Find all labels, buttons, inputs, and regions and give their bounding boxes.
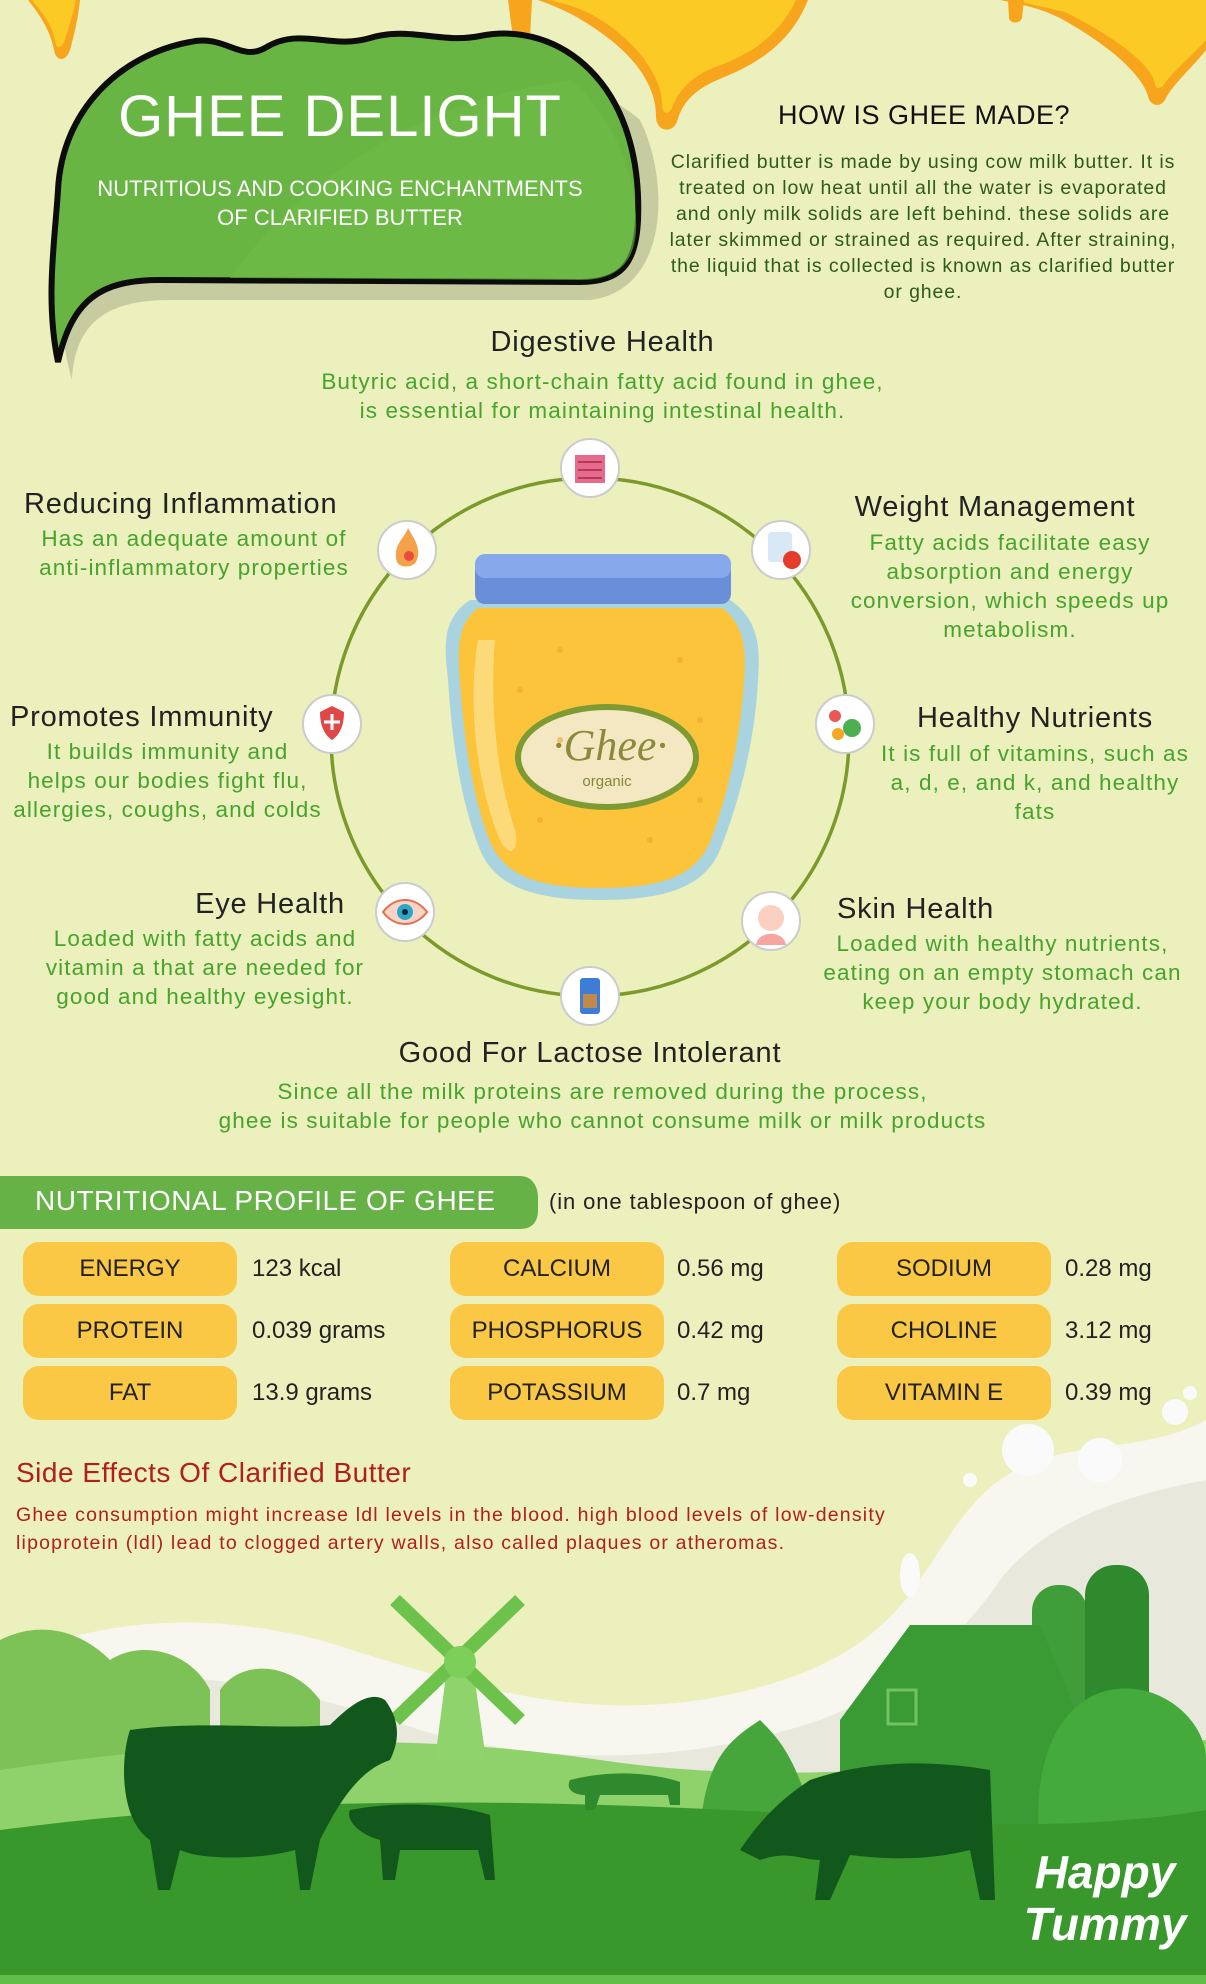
benefit: promotes immunity: It builds immunity and (47, 739, 288, 764)
nutrition table: 0.7 mg (677, 1379, 750, 1406)
benefit: skin health: eating on an empty stomach can (823, 960, 1182, 985)
nutrition table (23, 1242, 1152, 1420)
icon: scale (752, 521, 810, 579)
benefit: skin health: Skin Health (837, 893, 994, 925)
benefit: healthy nutrients: a, d, e, and k, and healthy (891, 770, 1179, 795)
nutrition table: 0.56 mg (677, 1255, 764, 1282)
nutrition table: 0.039 grams (252, 1317, 385, 1344)
benefit: promotes immunity: Promotes Immunity (10, 701, 273, 733)
nutrition header tab (0, 1176, 538, 1229)
heading: how is ghee made: HOW IS GHEE MADE? (778, 100, 1070, 130)
benefit: weight management: Fatty acids facilitate easy (869, 530, 1151, 555)
benefits circle (331, 478, 849, 996)
benefit: lactose intolerant: Since all the milk proteins are removed during the process, (277, 1079, 928, 1104)
benefit: weight management: absorption and energy (886, 559, 1134, 584)
nutrition table: 3.12 mg (1065, 1317, 1152, 1344)
nutrition table: 0.39 mg (1065, 1379, 1152, 1406)
benefit: digestive health: Butyric acid, a short-chain fatty acid found in ghee, (321, 369, 884, 394)
ghee jar: ·Ghee· (553, 721, 667, 770)
benefit: skin health: keep your body hydrated. (862, 989, 1143, 1014)
icon: inflammation (378, 521, 436, 579)
nutrition table: 13.9 grams (252, 1379, 372, 1406)
title: GHEE DELIGHT: GHEE DELIGHT (118, 84, 562, 149)
subtitle (97, 176, 583, 230)
benefit: skin health (823, 893, 1182, 1014)
logo: Happy Tummy: Happy (1035, 1846, 1175, 1898)
nutrition table: PHOSPHORUS (472, 1317, 642, 1344)
farm scene (0, 1565, 1206, 1984)
benefit: healthy nutrients (881, 702, 1189, 824)
side effects text: Ghee consumption might increase ldl levels in the blood. high blood levels of low-density (16, 1504, 886, 1526)
benefit: lactose intolerant (219, 1037, 986, 1133)
benefit: promotes immunity: helps our bodies fight flu, (28, 768, 307, 793)
benefit: digestive health (321, 326, 884, 423)
benefit: reducing inflammation: anti-inflammatory properties (39, 555, 349, 580)
side effects text: lipoprotein (ldl) lead to clogged artery walls, also called plaques or atheromas. (16, 1532, 785, 1554)
benefit: healthy nutrients: Healthy Nutrients (917, 702, 1153, 734)
logo: Happy Tummy: Tummy (1024, 1898, 1186, 1950)
side effects heading: Side Effects Of Clarified Butter (16, 1457, 411, 1488)
benefit: eye health: vitamin a that are needed for (46, 955, 364, 980)
icon: shield (303, 695, 361, 753)
benefit: reducing inflammation (24, 488, 349, 580)
nutrition table: PROTEIN (77, 1317, 183, 1344)
text: how is ghee made: the liquid that is collected is known as clarified butter (671, 255, 1175, 277)
icon: intestines (561, 439, 619, 497)
nutrition note: (in one tablespoon of ghee) (549, 1189, 841, 1214)
nutrition table: CALCIUM (503, 1255, 611, 1282)
nutrition table: CHOLINE (891, 1317, 997, 1344)
text: how is ghee made: Clarified butter is made by using cow milk butter. It is (671, 151, 1175, 173)
nutrition table: POTASSIUM (487, 1379, 627, 1406)
nutrition table: SODIUM (896, 1255, 992, 1282)
icon: milk (561, 967, 619, 1025)
nutrition table: VITAMIN E (885, 1379, 1003, 1406)
benefit: promotes immunity (10, 701, 322, 822)
benefit: weight management: Weight Management (855, 491, 1135, 523)
benefit: eye health: Eye Health (195, 888, 345, 920)
icon: eye (376, 883, 434, 941)
benefit: eye health: Loaded with fatty acids and (54, 926, 356, 951)
icon: nutrients (816, 695, 874, 753)
benefit: digestive health: Digestive Health (491, 326, 714, 358)
icon: skin (742, 892, 800, 950)
text: how is ghee made: and only milk solids are left behind. these solids are (676, 203, 1170, 225)
benefit: eye health: good and healthy eyesight. (56, 984, 354, 1009)
milk splash (0, 1386, 1206, 1800)
benefit: weight management: metabolism. (943, 617, 1077, 642)
nutrition table: 0.28 mg (1065, 1255, 1152, 1282)
nutrition table: 0.42 mg (677, 1317, 764, 1344)
nutrition heading: NUTRITIONAL PROFILE OF GHEE (35, 1185, 496, 1216)
benefit: reducing inflammation: Reducing Inflammation (24, 488, 337, 520)
benefit: weight management: conversion, which speeds up (851, 588, 1169, 613)
ghee jar (446, 554, 759, 900)
side effects text (16, 1504, 886, 1554)
benefit: healthy nutrients: fats (1015, 799, 1055, 824)
benefit: digestive health: is essential for maintaining intestinal health. (360, 398, 845, 423)
benefit: lactose intolerant: Good For Lactose Intolerant (399, 1037, 781, 1069)
text: how is ghee made: treated on low heat until all the water is evaporated (679, 177, 1167, 199)
logo: Happy Tummy (1024, 1846, 1188, 1950)
text: how is ghee made: or ghee. (884, 281, 962, 303)
benefit: promotes immunity: allergies, coughs, and colds (13, 797, 322, 822)
benefit: skin health: Loaded with healthy nutrients, (837, 931, 1168, 956)
subtitle: NUTRITIOUS AND COOKING ENCHANTMENTS (97, 176, 583, 201)
nutrition table: ENERGY (79, 1255, 181, 1282)
nutrition table: FAT (109, 1379, 151, 1406)
benefit: reducing inflammation: Has an adequate amount of (41, 526, 347, 551)
ghee jar: organic (582, 773, 632, 790)
text: how is ghee made (670, 151, 1176, 303)
benefit: healthy nutrients: It is full of vitamins, such as (881, 741, 1189, 766)
text: how is ghee made: later skimmed or strained as required. After straining, (670, 229, 1176, 251)
benefit: eye health (46, 888, 364, 1009)
nutrition table: 123 kcal (252, 1255, 341, 1282)
benefit: weight management (851, 491, 1169, 642)
subtitle: OF CLARIFIED BUTTER (217, 205, 463, 230)
title bubble (51, 34, 658, 380)
benefit: lactose intolerant: ghee is suitable for people who cannot consume milk or milk products (219, 1108, 986, 1133)
honey drips (28, 0, 1206, 130)
